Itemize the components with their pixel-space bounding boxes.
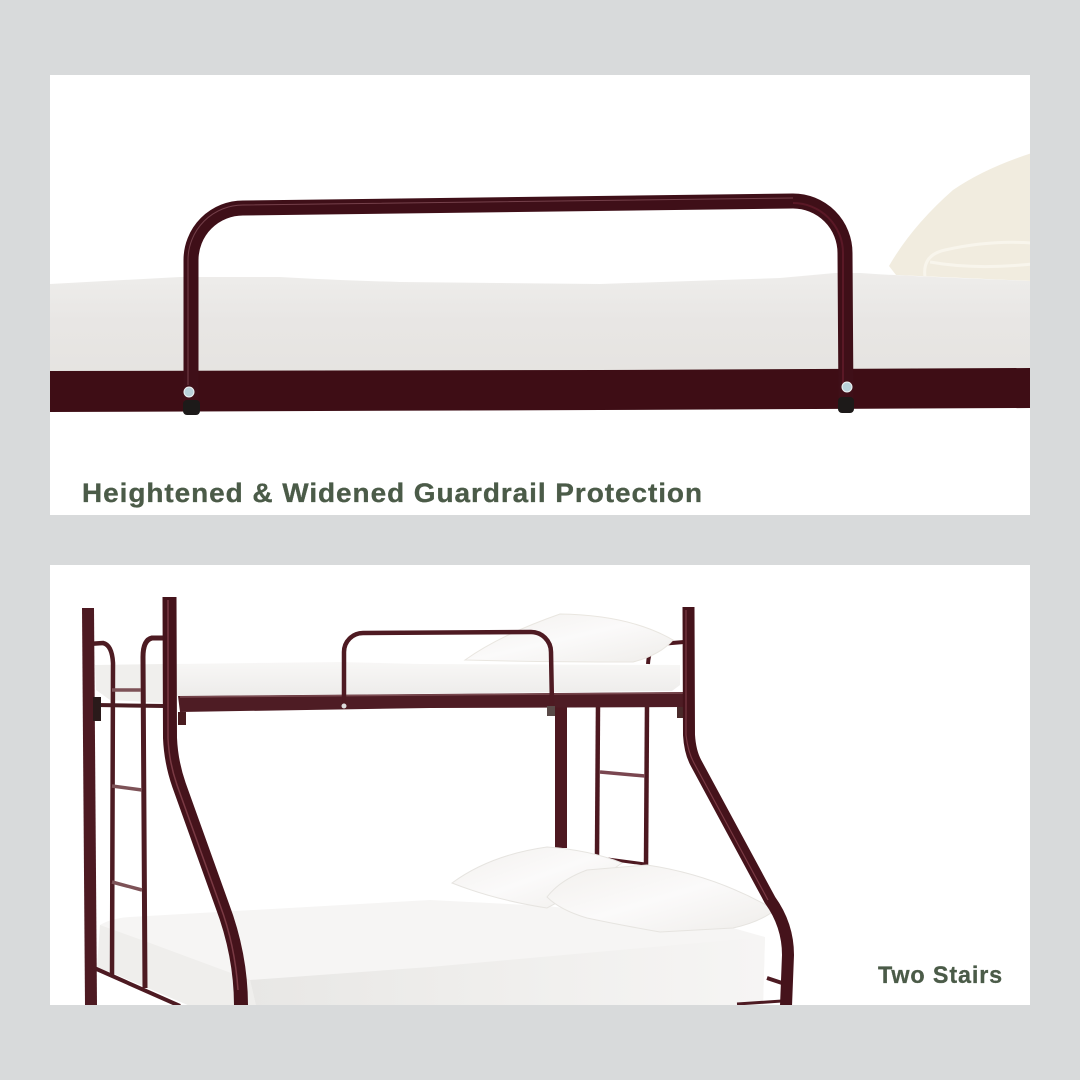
upper pillow — [465, 614, 673, 662]
left rail bolt and foot — [183, 387, 200, 415]
front-left post — [168, 597, 241, 1006]
right ladder — [597, 642, 684, 866]
lower pillows — [452, 847, 775, 932]
front-right post — [686, 607, 788, 1006]
rear-right post — [555, 705, 567, 848]
guardrail tube — [188, 198, 846, 405]
pillow — [889, 153, 1032, 281]
caption: two stairs: Two Stairs — [878, 962, 1003, 989]
upper guardrail — [342, 632, 552, 708]
rear-left post — [88, 608, 91, 1006]
lower frame — [92, 967, 782, 1006]
upper mattress far end — [95, 664, 165, 703]
panel: two stairs — [50, 565, 1030, 1006]
caption: guardrail: Heightened & Widened Guardrail Protection — [82, 478, 703, 508]
mattress — [50, 273, 1030, 371]
bed frame bar — [50, 368, 1030, 412]
panel: guardrail — [50, 75, 1032, 515]
left ladder — [88, 638, 165, 988]
lower mattress — [97, 900, 765, 1006]
rear frame and brackets — [93, 697, 165, 721]
right rail bolt and foot — [838, 382, 854, 413]
upper frame bar — [178, 692, 687, 725]
upper mattress — [176, 662, 680, 696]
